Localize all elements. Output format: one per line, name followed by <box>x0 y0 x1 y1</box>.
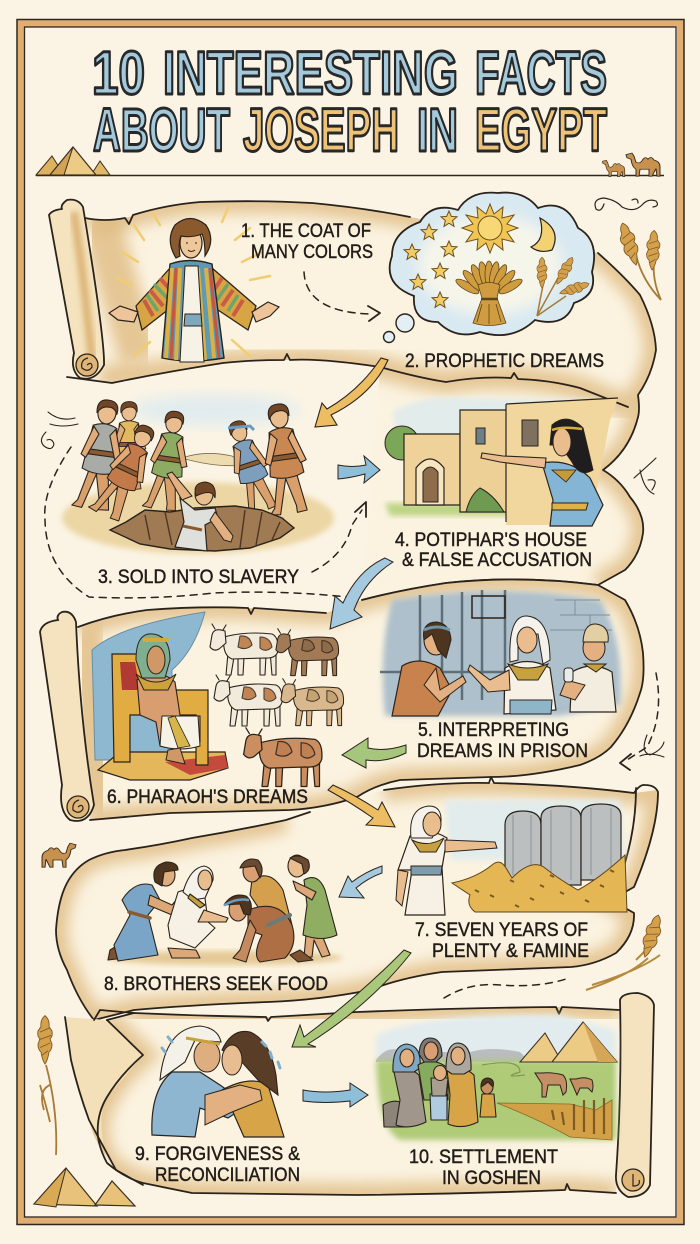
label 10: IN GOSHEN <box>442 1167 541 1189</box>
label 4 <box>395 529 592 571</box>
Joseph <box>468 616 556 714</box>
woman body <box>222 1081 284 1137</box>
parchment ribbon: facts 1, 2 and 4 <box>67 201 656 600</box>
wheat sheaf <box>454 261 524 326</box>
throne <box>112 654 208 765</box>
embracing arms <box>205 1085 262 1125</box>
shrub <box>466 488 504 512</box>
tower window <box>476 428 485 444</box>
overseer <box>396 806 497 915</box>
arrow 9 to 10 <box>303 1083 368 1107</box>
stars <box>404 211 457 307</box>
title: INTERESTING <box>163 39 458 107</box>
pyramids bottom left <box>32 1168 150 1207</box>
fact 9: forgiveness and reconciliation <box>152 1026 284 1137</box>
face details <box>186 243 197 252</box>
curtain <box>92 612 205 760</box>
label 2: 2. PROPHETIC DREAMS <box>405 350 604 372</box>
small pyramid <box>520 1033 562 1062</box>
left woman <box>393 1044 426 1127</box>
decorative swirl right of fact 4 <box>634 458 656 494</box>
horizon line with pyramids and camels <box>36 147 664 177</box>
fact 1: Joseph in the coat of many colors <box>109 208 279 362</box>
label 1 <box>241 220 373 263</box>
grass <box>385 503 510 516</box>
arrow 7 to 8 <box>339 866 382 898</box>
label 1: 1. THE COAT OF <box>241 220 371 242</box>
low wing <box>404 434 460 505</box>
head <box>180 228 202 258</box>
sky <box>130 394 300 426</box>
man head <box>194 1040 220 1072</box>
right sleeve <box>206 268 256 330</box>
label 3: 3. SOLD INTO SLAVERY <box>98 566 299 588</box>
left swirl decoration <box>41 412 78 449</box>
wheat band <box>497 1100 612 1140</box>
title: 10 <box>92 39 145 107</box>
right woman <box>446 1043 478 1127</box>
silos <box>505 804 621 885</box>
glowing rays <box>116 208 270 356</box>
family <box>383 1038 496 1127</box>
title: FACTS <box>475 39 607 107</box>
cows <box>210 624 344 786</box>
fact 10: settlement in Goshen <box>376 1015 617 1140</box>
man <box>152 1072 248 1137</box>
scroll roll: fact 10 <box>616 993 654 1197</box>
thought cloud: prophetic dreams <box>384 193 594 342</box>
dashed arrow 1 to 2 <box>304 272 380 321</box>
grain speckles <box>475 870 614 907</box>
father <box>418 1038 448 1100</box>
pit ridges <box>145 510 280 548</box>
belt <box>184 314 202 326</box>
small child <box>480 1078 496 1117</box>
headdress <box>160 1026 221 1080</box>
boy in pit <box>167 472 233 551</box>
tower <box>460 410 507 512</box>
standing brother green <box>288 855 337 957</box>
title: IN <box>417 96 458 164</box>
red coat stripes <box>171 268 219 359</box>
decorative swirl top right <box>595 198 657 210</box>
label 9 <box>135 1143 300 1186</box>
prison window <box>472 596 505 618</box>
left sleeve <box>136 268 178 330</box>
ground <box>107 951 343 965</box>
fact 7: seven years of plenty and famine <box>396 800 627 915</box>
tunic <box>180 266 204 362</box>
label 4: & FALSE ACCUSATION <box>402 549 592 571</box>
wheat ears <box>552 1098 604 1134</box>
dashed arrow 3 to 4 <box>312 502 366 572</box>
label 10: 10. SETTLEMENT <box>409 1146 558 1168</box>
brothers <box>72 397 313 524</box>
sky <box>376 1015 616 1060</box>
ground <box>62 482 334 554</box>
bowing brother yellow <box>240 859 292 925</box>
label 9: 9. FORGIVENESS & <box>135 1143 300 1165</box>
label 5: 5. INTERPRETING <box>418 719 569 741</box>
door <box>423 467 438 502</box>
label 4: 4. POTIPHAR'S HOUSE <box>395 529 587 551</box>
fellow prisoner <box>392 622 466 716</box>
title: EGYPT <box>475 96 607 164</box>
title: JOSEPH <box>243 96 399 164</box>
arrow 2 to 3 <box>315 358 388 427</box>
wheat right <box>586 913 665 990</box>
rock seat <box>383 1101 406 1127</box>
platform <box>98 752 228 780</box>
label 7: PLENTY & FAMINE <box>432 940 589 962</box>
bubbles <box>396 314 414 332</box>
scroll roll: top left <box>49 200 104 379</box>
title <box>92 39 607 164</box>
scroll roll: fact 6 <box>40 612 94 821</box>
kneeling blue brother <box>108 862 186 961</box>
parchment ribbon: facts 7 and 8 <box>56 777 658 1020</box>
title: ABOUT <box>93 96 230 164</box>
hills <box>376 1049 530 1062</box>
label 9: RECONCILIATION <box>155 1164 300 1186</box>
camel left <box>42 843 76 867</box>
label 5 <box>417 719 588 762</box>
headband <box>186 1038 220 1044</box>
kneeling brown brother <box>224 895 313 962</box>
coat stripes <box>166 268 214 360</box>
child in blue <box>430 1066 448 1120</box>
right building <box>506 398 618 525</box>
moon <box>531 218 555 251</box>
label 6: 6. PHARAOH'S DREAMS <box>107 786 308 808</box>
second prisoner <box>560 624 616 712</box>
grazing animals <box>535 1073 593 1097</box>
bubble small <box>384 332 394 342</box>
sleeve stripes blue and green <box>147 284 238 311</box>
hands <box>109 306 138 322</box>
small wheat bunch <box>537 255 591 316</box>
building edge <box>506 398 618 522</box>
fact 8: brothers seek food <box>107 855 343 965</box>
arrow 3 to 4 <box>338 456 380 483</box>
label 10 <box>409 1146 558 1189</box>
white robed Joseph <box>168 866 228 958</box>
hair <box>170 218 211 258</box>
large pyramid <box>552 1022 617 1062</box>
winding stream <box>482 1063 525 1076</box>
sun <box>462 204 518 253</box>
fact 4: Potiphar's house scene <box>385 397 618 526</box>
sleeve stripes <box>144 278 243 316</box>
parchment ribbon: facts 9 and 10 <box>65 1007 620 1195</box>
label 1: MANY COLORS <box>251 241 373 263</box>
robe <box>162 260 224 361</box>
sky <box>392 397 600 440</box>
Pharaoh <box>136 634 200 764</box>
arrow 5 to 6 <box>342 738 406 768</box>
tears <box>162 1037 280 1068</box>
dashed route around fact 3 <box>45 447 348 598</box>
wheat left <box>38 1016 56 1155</box>
woman <box>481 419 603 526</box>
throne back <box>120 662 140 690</box>
parchment ribbon: facts 5 and 6 <box>78 579 644 820</box>
fact 6: Pharaoh and cows <box>92 612 344 786</box>
dashed arrow right side <box>620 673 664 770</box>
fact 3: sold into slavery scene <box>62 394 334 554</box>
bricks <box>550 600 612 630</box>
label 7: 7. SEVEN YEARS OF <box>415 919 588 941</box>
red carpet <box>165 755 228 775</box>
distant dune <box>182 453 246 466</box>
fact 5: interpreting dreams in prison <box>380 590 621 716</box>
grass field <box>376 1060 616 1140</box>
arrow 8 to 9 <box>292 950 411 1047</box>
label 5: DREAMS IN PRISON <box>417 740 588 762</box>
dashed line below fact 7 <box>444 978 569 998</box>
house window <box>522 420 538 446</box>
label 8: 8. BROTHERS SEEK FOOD <box>104 973 328 995</box>
blue headband <box>228 426 254 430</box>
pyramid shade <box>583 1022 617 1062</box>
grain piles <box>452 855 627 912</box>
sky <box>445 800 625 860</box>
silo ribs <box>513 808 611 880</box>
label 7 <box>415 919 589 962</box>
arrow 4 to 6 <box>330 558 393 629</box>
wheat top right <box>616 221 661 300</box>
arrow 6 to 7 <box>328 785 395 827</box>
tree <box>385 426 419 460</box>
woman hair <box>222 1031 278 1095</box>
pit <box>110 506 294 551</box>
prison bars <box>380 590 510 700</box>
arch door <box>416 459 444 505</box>
prison background <box>383 591 621 716</box>
woman face <box>222 1045 242 1075</box>
